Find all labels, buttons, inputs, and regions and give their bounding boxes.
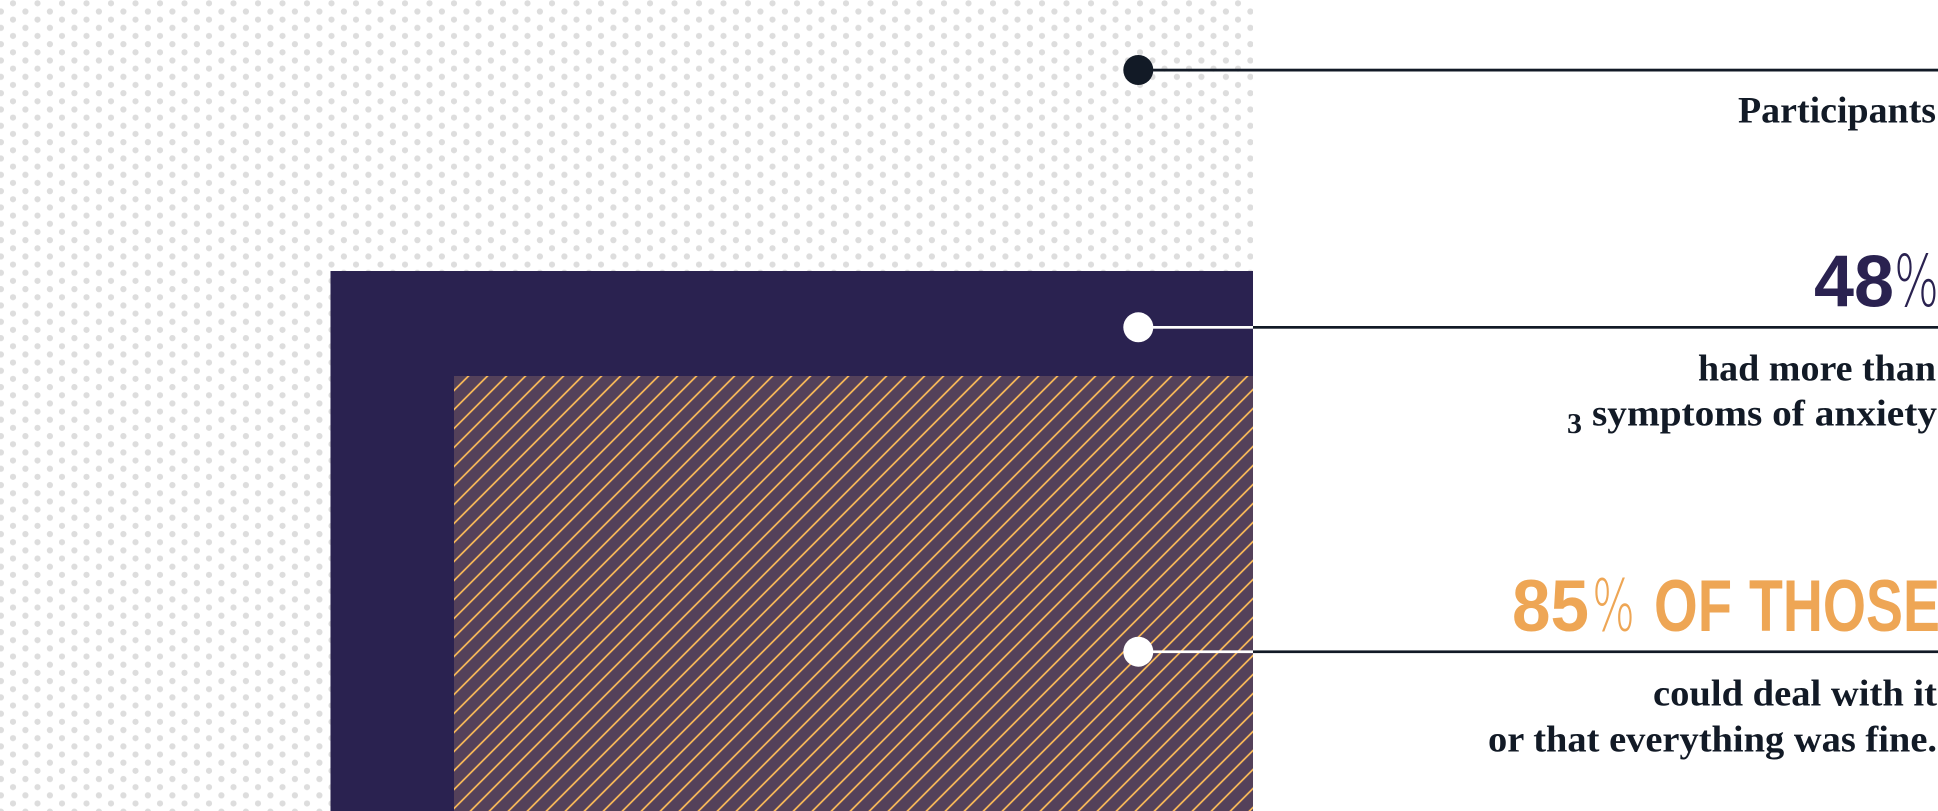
statistic: 48% <box>1814 240 1938 323</box>
statistic: 85% of those <box>1512 564 1938 648</box>
text: had more than 3 symptoms of anxiety: symptoms of anxiety <box>1592 394 1938 434</box>
text: could deal with it or that everything was fine: or that everything was fine. <box>1488 720 1937 760</box>
statistic: 85% of those: % <box>1592 564 1635 648</box>
text: had more than 3 symptoms of anxiety: had more than <box>1698 348 1936 390</box>
statistic: 85% of those: OF <box>1654 566 1732 647</box>
dotted background panel <box>0 0 1253 811</box>
statistic: 48%: 48 <box>1814 242 1894 322</box>
callout: 48% marker <box>1123 312 1938 342</box>
text: had more than 3 symptoms of anxiety: 3 <box>1567 408 1582 440</box>
label: participants: Participants <box>1738 90 1936 132</box>
statistic: 85% of those: 85 <box>1512 566 1589 647</box>
navy panel: had symptoms of anxiety <box>330 271 1253 811</box>
text: had more than 3 symptoms of anxiety <box>1567 348 1938 440</box>
text: could deal with it or that everything was fine: could deal with it <box>1653 674 1938 714</box>
callout: participants marker <box>1123 55 1938 85</box>
text: could deal with it or that everything was fine <box>1488 674 1938 760</box>
hatched panel: those who said they could deal with it <box>454 376 1253 811</box>
callout: 85% marker <box>1123 637 1938 667</box>
